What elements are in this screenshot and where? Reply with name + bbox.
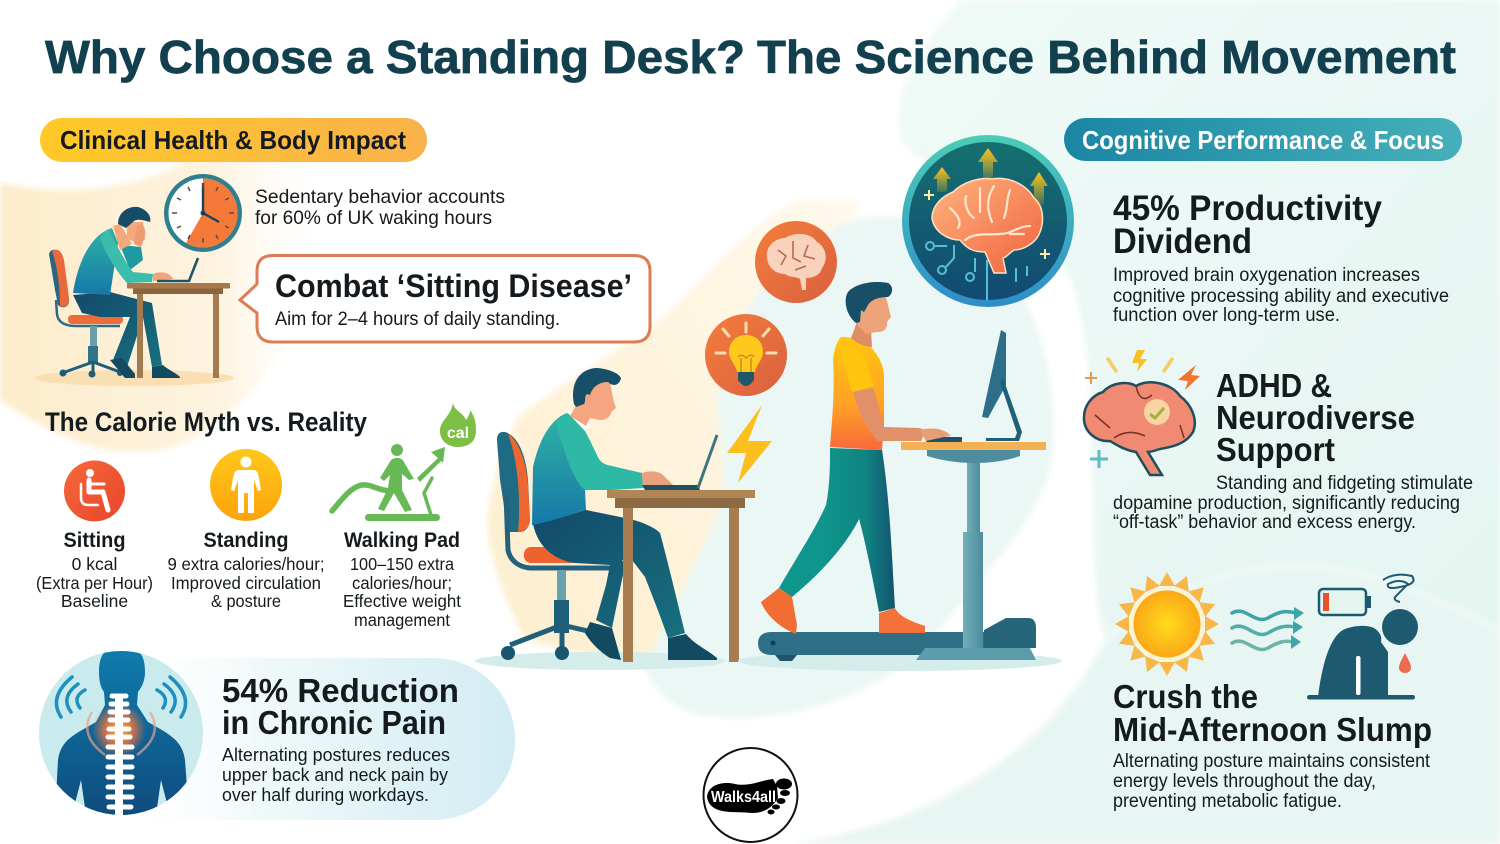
icon: brain badge [755, 221, 837, 303]
icon: low battery and tired person [1307, 575, 1418, 700]
heading: adhd support: Neurodiverse [1216, 400, 1415, 437]
text: productivity body [1113, 265, 1449, 326]
text: sitting column [36, 529, 153, 611]
text: slump body: Alternating posture maintains consistent [1113, 751, 1431, 772]
callout: combat sitting disease: Combat ‘Sitting Disease’ [275, 268, 632, 304]
text: sitting column: (Extra per Hour) [36, 573, 153, 593]
text: adhd body: dopamine production, significantly reducing [1113, 493, 1460, 514]
heading: 54% reduction [222, 673, 459, 742]
text: sedentary stat: Sedentary behavior accounts [255, 186, 505, 208]
logo: walks4all [704, 748, 798, 842]
title [45, 31, 1456, 83]
text: walking pad column: calories/hour; [352, 573, 452, 593]
icon: lightbulb badge [705, 314, 787, 396]
illustration: walking worker at treadmill desk [738, 282, 1062, 671]
illustration: slumped desk worker [34, 207, 234, 386]
callout: combat sitting disease [240, 256, 650, 342]
text: standing column: Improved circulation [171, 573, 321, 593]
illustration: seated worker [475, 368, 755, 670]
heading: clinical health: Clinical Health & Body Impact [60, 125, 406, 155]
heading: crush the slump [1113, 678, 1432, 748]
text: productivity body: Improved brain oxygenation increases [1113, 265, 1420, 286]
text: walking pad column: 100–150 extra [350, 554, 454, 574]
text: adhd body [1113, 473, 1473, 533]
text: sitting column: Baseline [61, 591, 128, 611]
text: adhd body: Standing and fidgeting stimulate [1216, 473, 1473, 494]
heading: adhd support [1216, 368, 1415, 469]
text: walking pad column [343, 529, 461, 630]
title: The Science Behind Movement [757, 31, 1456, 83]
heading: adhd support: Support [1216, 432, 1335, 469]
callout: combat sitting disease: Aim for 2–4 hours of daily standing. [275, 308, 560, 330]
heading: calorie myth: The Calorie Myth vs. Reality [45, 407, 367, 437]
icon: clock [164, 174, 242, 252]
text: standing column: 9 extra calories/hour; [168, 554, 324, 574]
icon: walking pad [332, 403, 476, 521]
heading: productivity [1113, 189, 1382, 261]
text: pain body [222, 744, 450, 805]
text: slump body [1113, 751, 1431, 812]
text: adhd body: “off-task” behavior and excess energy. [1113, 512, 1416, 533]
text: sedentary stat [255, 186, 505, 229]
icon: sitting [64, 460, 125, 522]
heading: clinical health [40, 118, 427, 162]
icon: back and spine [39, 650, 203, 815]
text: productivity body: cognitive processing ability and executive [1113, 286, 1449, 307]
text: standing column: Standing [204, 529, 288, 552]
logo: walks4all: Walks4all [711, 789, 776, 806]
text: productivity body: function over long-term use. [1113, 305, 1340, 326]
icon: lightning bolt [727, 405, 772, 483]
heading: 54% reduction: in Chronic Pain [222, 705, 446, 742]
heading: 54% reduction: 54% Reduction [222, 673, 459, 710]
text: pain body: Alternating postures reduces [222, 744, 450, 765]
heading: crush the slump: Mid-Afternoon Slump [1113, 711, 1432, 748]
text: pain body: upper back and neck pain by [222, 764, 449, 785]
text: slump body: energy levels throughout the day, [1113, 771, 1376, 792]
heading: productivity: Dividend [1113, 222, 1252, 261]
icon: standing [210, 449, 282, 521]
icon: sun [1115, 572, 1219, 676]
text: sedentary stat: for 60% of UK waking hours [255, 207, 492, 229]
panel: chronic pain [39, 650, 515, 820]
text: slump body: preventing metabolic fatigue. [1113, 791, 1342, 812]
heading: cognitive performance [1064, 118, 1462, 161]
title: Why Choose a Standing Desk? [45, 31, 745, 83]
heading: cognitive performance: Cognitive Performance & Focus [1082, 125, 1444, 155]
icon: walking pad: cal [447, 425, 469, 442]
text: walking pad column: Effective weight [343, 591, 461, 611]
icon: adhd brain [1084, 350, 1200, 475]
heading: crush the slump: Crush the [1113, 678, 1258, 715]
icon: fatigue waves [1232, 607, 1304, 650]
text: walking pad column: Walking Pad [344, 529, 460, 552]
heading: productivity: 45% Productivity [1113, 189, 1382, 228]
text: sitting column: 0 kcal [72, 554, 117, 574]
icon: cognitive brain medallion [902, 135, 1074, 307]
heading: adhd support: ADHD & [1216, 368, 1332, 405]
text: standing column [168, 529, 324, 611]
text: walking pad column: management [354, 610, 450, 630]
text: sitting column: Sitting [64, 529, 126, 552]
text: pain body: over half during workdays. [222, 784, 429, 805]
text: standing column: & posture [211, 591, 281, 611]
